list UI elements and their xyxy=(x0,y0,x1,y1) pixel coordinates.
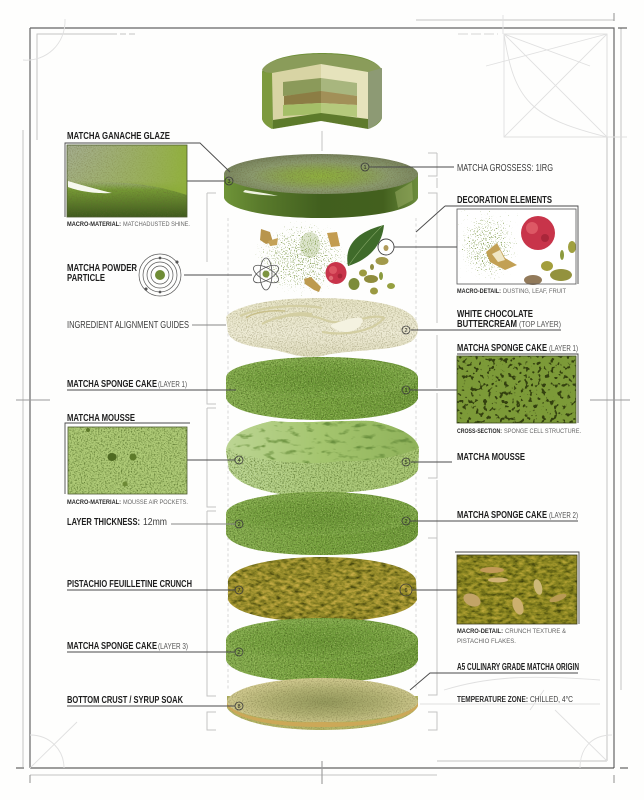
caption: glaze macro material xyxy=(67,221,190,228)
layer: bottom crust: 8 xyxy=(237,704,241,710)
caption: crunch macro detail: CRUNCH TEXTURE & xyxy=(505,628,567,635)
label: matcha sponge cake layer 1 left: MATCHA SPONGE CAKE xyxy=(67,379,157,390)
inset: crunch macro photo xyxy=(457,555,577,624)
label: white chocolate buttercream: (TOP LAYER) xyxy=(519,320,561,329)
label: matcha powder particle: PARTICLE xyxy=(67,273,105,284)
label: temperature zone: CHILLED, 4°C xyxy=(530,694,573,704)
label: matcha powder particle xyxy=(67,263,138,284)
layer: bottom crust xyxy=(227,678,418,730)
caption: crunch macro detail: MACRO-DETAIL: xyxy=(457,628,503,635)
detail marker circle xyxy=(378,239,394,255)
inset: sponge cross-section photo xyxy=(457,356,576,423)
assembled cake cutaway xyxy=(262,53,382,131)
label: a5 culinary grade matcha origin: A5 CULINARY GRADE MATCHA ORIGIN xyxy=(457,662,579,673)
label: temperature zone: TEMPERATURE ZONE: xyxy=(457,694,528,704)
pistachio nuts xyxy=(348,257,395,294)
layer: pistachio feuilletine crunch: 6 xyxy=(404,588,408,594)
caption: crunch macro detail: PISTACHIO FLAKES. xyxy=(457,638,516,645)
inset: mousse macro photo xyxy=(68,427,187,494)
caption: mousse air pockets: MOUSSE AIR POCKETS. xyxy=(123,499,188,506)
label: layer thickness: LAYER THICKNESS: xyxy=(67,517,140,528)
layer: matcha sponge cake 3: 2 xyxy=(237,650,241,656)
heading: matcha mousse left: MATCHA MOUSSE xyxy=(67,413,135,424)
caption: sponge cell structure xyxy=(457,428,581,435)
layer: matcha sponge cake 2: 2 xyxy=(404,519,408,525)
caption: mousse air pockets: MACRO-MATERIAL: xyxy=(67,499,121,506)
label: white chocolate buttercream: BUTTERCREAM xyxy=(457,319,517,330)
label: matcha sponge cake layer 2: (LAYER 2) xyxy=(549,511,578,520)
label: matcha sponge cake layer 2: MATCHA SPONGE CAKE xyxy=(457,510,547,521)
caption: sponge cell structure: SPONGE CELL STRUCTURE. xyxy=(504,428,581,435)
layer: matcha ganache glaze xyxy=(224,154,418,218)
layer: matcha mousse: 5 xyxy=(404,460,408,466)
layer: matcha sponge cake 3 xyxy=(226,618,418,682)
icon: powder particle orbits xyxy=(139,254,181,296)
heading: matcha sponge cake layer 1 right: MATCHA SPONGE CAKE xyxy=(457,343,547,354)
label: white chocolate buttercream: WHITE CHOCOLATE xyxy=(457,309,533,320)
caption: decoration macro detail: DUSTING, LEAF, FRUIT xyxy=(503,288,566,295)
green leaf xyxy=(347,225,384,266)
white chocolate flakes xyxy=(260,229,340,292)
layer: matcha mousse: 4 xyxy=(237,458,241,464)
layer: matcha mousse xyxy=(226,421,419,497)
label: layer thickness: 12mm xyxy=(143,517,167,528)
label: matcha powder particle: MATCHA POWDER xyxy=(67,263,138,274)
label: matcha mousse right: MATCHA MOUSSE xyxy=(457,452,525,463)
caption: sponge cell structure: CROSS-SECTION: xyxy=(457,428,502,435)
cut face left xyxy=(272,64,321,129)
layer: matcha sponge cake 1 xyxy=(226,357,418,420)
label: matcha sponge cake layer 1 left: (LAYER 1) xyxy=(158,380,187,389)
layer: white chocolate buttercream: 2 xyxy=(404,328,408,334)
cake outer shell xyxy=(262,53,382,129)
inset: glaze macro photo xyxy=(67,145,187,217)
callout number markers on glaze xyxy=(225,163,369,185)
layer: matcha sponge cake 2 xyxy=(226,492,418,555)
label: matcha grossess: MATCHA GROSSESS: 1IRG xyxy=(457,163,553,174)
cut face right xyxy=(321,64,368,129)
caption: mousse air pockets xyxy=(67,499,188,506)
callout number markers on glaze: 3 xyxy=(227,179,231,185)
label: pistachio feuilletine crunch: PISTACHIO FEUILLETINE CRUNCH xyxy=(67,579,192,590)
caption: decoration macro detail: MACRO-DETAIL: xyxy=(457,288,501,295)
label: matcha sponge cake layer 3: MATCHA SPONGE CAKE xyxy=(67,641,157,652)
label: matcha sponge cake layer 3: (LAYER 3) xyxy=(158,642,188,651)
layer: matcha sponge cake 2: 2 xyxy=(237,522,241,528)
label: ingredient alignment guides: INGREDIENT ALIGNMENT GUIDES xyxy=(67,320,189,331)
atom icon xyxy=(251,258,281,290)
layer: pistachio feuilletine crunch: 7 xyxy=(237,588,241,594)
caption: decoration macro detail xyxy=(457,288,566,295)
heading: matcha ganache glaze: MATCHA GANACHE GLAZE xyxy=(67,131,170,142)
inset: decoration macro photo xyxy=(457,209,576,285)
heading: matcha sponge cake layer 1 right: (LAYER 1) xyxy=(549,344,578,353)
caption: glaze macro material: MACRO-MATERIAL: xyxy=(67,221,121,228)
layer: white chocolate buttercream xyxy=(226,298,418,357)
matcha dust cloud xyxy=(252,220,352,296)
label: white chocolate buttercream xyxy=(457,309,561,330)
decoration elements xyxy=(251,220,395,296)
heading: decoration elements: DECORATION ELEMENTS xyxy=(457,195,552,206)
layer: pistachio feuilletine crunch xyxy=(228,557,417,622)
leader lines xyxy=(65,143,579,706)
caption: glaze macro material: MATCHADUSTED SHINE. xyxy=(123,221,190,228)
raspberry xyxy=(326,262,346,284)
callout number markers on glaze: 1 xyxy=(363,165,367,171)
layer: matcha sponge cake 1: 1 xyxy=(404,388,408,394)
label: bottom crust syrup soak: BOTTOM CRUST / SYRUP SOAK xyxy=(67,695,184,706)
caption: crunch macro detail xyxy=(457,628,567,645)
